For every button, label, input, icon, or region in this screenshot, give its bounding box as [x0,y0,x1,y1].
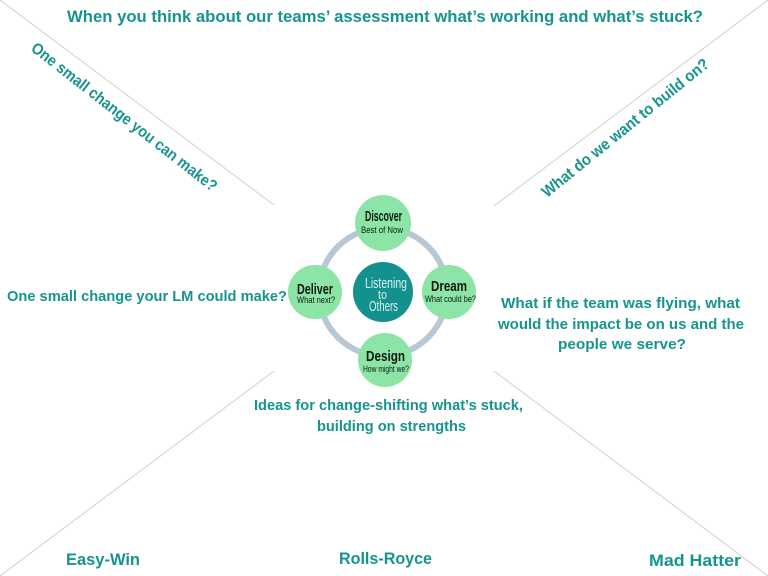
node: discover [355,195,411,251]
node: dream: What could be? [425,294,476,304]
node: dream: Dream [431,278,467,295]
text block: what if the team was flying: people we serve? [558,336,686,353]
ring [319,228,447,356]
text block: ideas for change [254,397,523,435]
text block: what if the team was flying: What if the team was flying, what [501,295,740,312]
label: one small change you can make: One small change you can make? [28,40,220,195]
center: listening to others [353,262,413,322]
node: discover: Discover [365,208,402,225]
text block: what if the team was flying [497,295,744,353]
label: what do we want to build on: What do we want to build on? [539,56,713,201]
text block: ideas for change: Ideas for change-shifting what’s stuck, [254,397,523,414]
center: listening to others: to [378,287,387,302]
node: dream [422,265,476,319]
node: deliver: What next? [297,295,335,305]
node: discover: Best of Now [361,225,403,235]
label: mad hatter: Mad Hatter [649,551,741,570]
text block: ideas for change: building on strengths [317,418,466,435]
text block: what if the team was flying: would the impact be on us and the [497,316,744,333]
center: listening to others: Others [369,298,398,315]
label: easy-win: Easy-Win [66,550,140,569]
center: listening to others: Listening [365,275,407,292]
cycle diagram [288,195,476,387]
label: one small change your LM could make: One small change your LM could make? [7,288,287,305]
label: rolls-royce: Rolls-Royce [339,549,432,568]
title: When you think about our teams’ assessment what’s working and what’s stuck? [67,7,703,26]
node: design: How might we? [363,364,409,374]
node: deliver: Deliver [297,281,333,298]
node: deliver [288,265,342,319]
node: design: Design [366,348,405,365]
node: design [358,333,412,387]
